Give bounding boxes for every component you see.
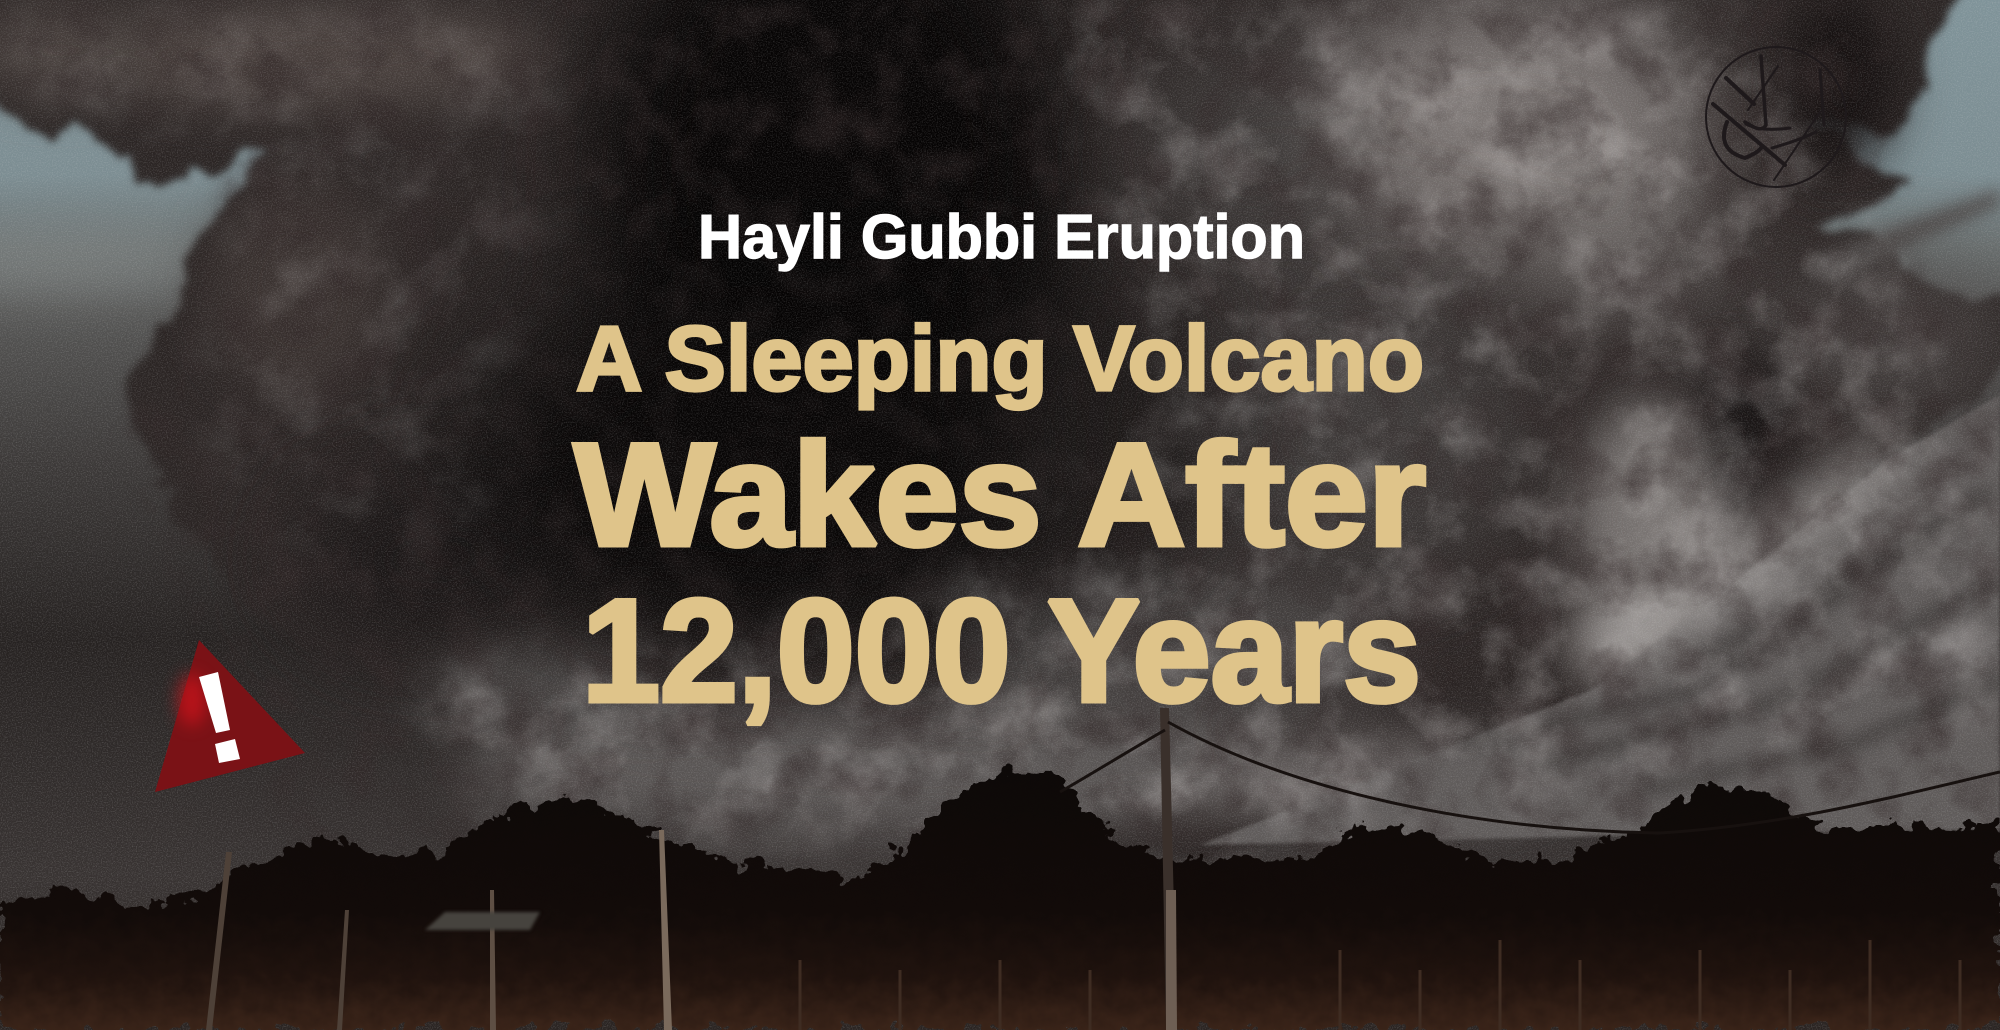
lit ash billows on the right bbox=[1130, 0, 2000, 580]
house roof bbox=[425, 912, 540, 930]
pale cloud strip at left bbox=[0, 235, 230, 295]
power lines bbox=[1060, 722, 2000, 833]
title block bbox=[574, 203, 1426, 732]
pale column of ash bbox=[1575, 400, 1725, 640]
dark plume behind the logo bbox=[1785, 0, 1895, 170]
triangle bbox=[155, 640, 305, 792]
dark gap beside the pale column bbox=[1700, 350, 1790, 510]
dim text backdrop bbox=[430, 200, 1230, 660]
lower haze band bbox=[430, 570, 1560, 835]
brush stems bbox=[800, 940, 1960, 1030]
headline line 2: Wakes After bbox=[574, 413, 1426, 576]
tree line silhouette bbox=[0, 708, 2000, 1030]
icon: red warning triangle bbox=[155, 640, 305, 792]
icon: circular calligraphy logo bbox=[1706, 47, 1846, 187]
exclamation mark bbox=[199, 672, 240, 763]
kicker: Hayli Gubbi Eruption: Hayli Gubbi Eruption bbox=[698, 203, 1305, 272]
headline line 3: 12,000 Years bbox=[582, 569, 1421, 732]
utility poles bbox=[206, 708, 1177, 1030]
headline line 1: A Sleeping Volcano bbox=[576, 308, 1424, 410]
black core of the column bbox=[290, 0, 1070, 650]
mountain slope bbox=[1200, 395, 2000, 845]
upper-left brown billows bbox=[0, 0, 550, 400]
far-right sky wisp bbox=[1810, 190, 2000, 285]
